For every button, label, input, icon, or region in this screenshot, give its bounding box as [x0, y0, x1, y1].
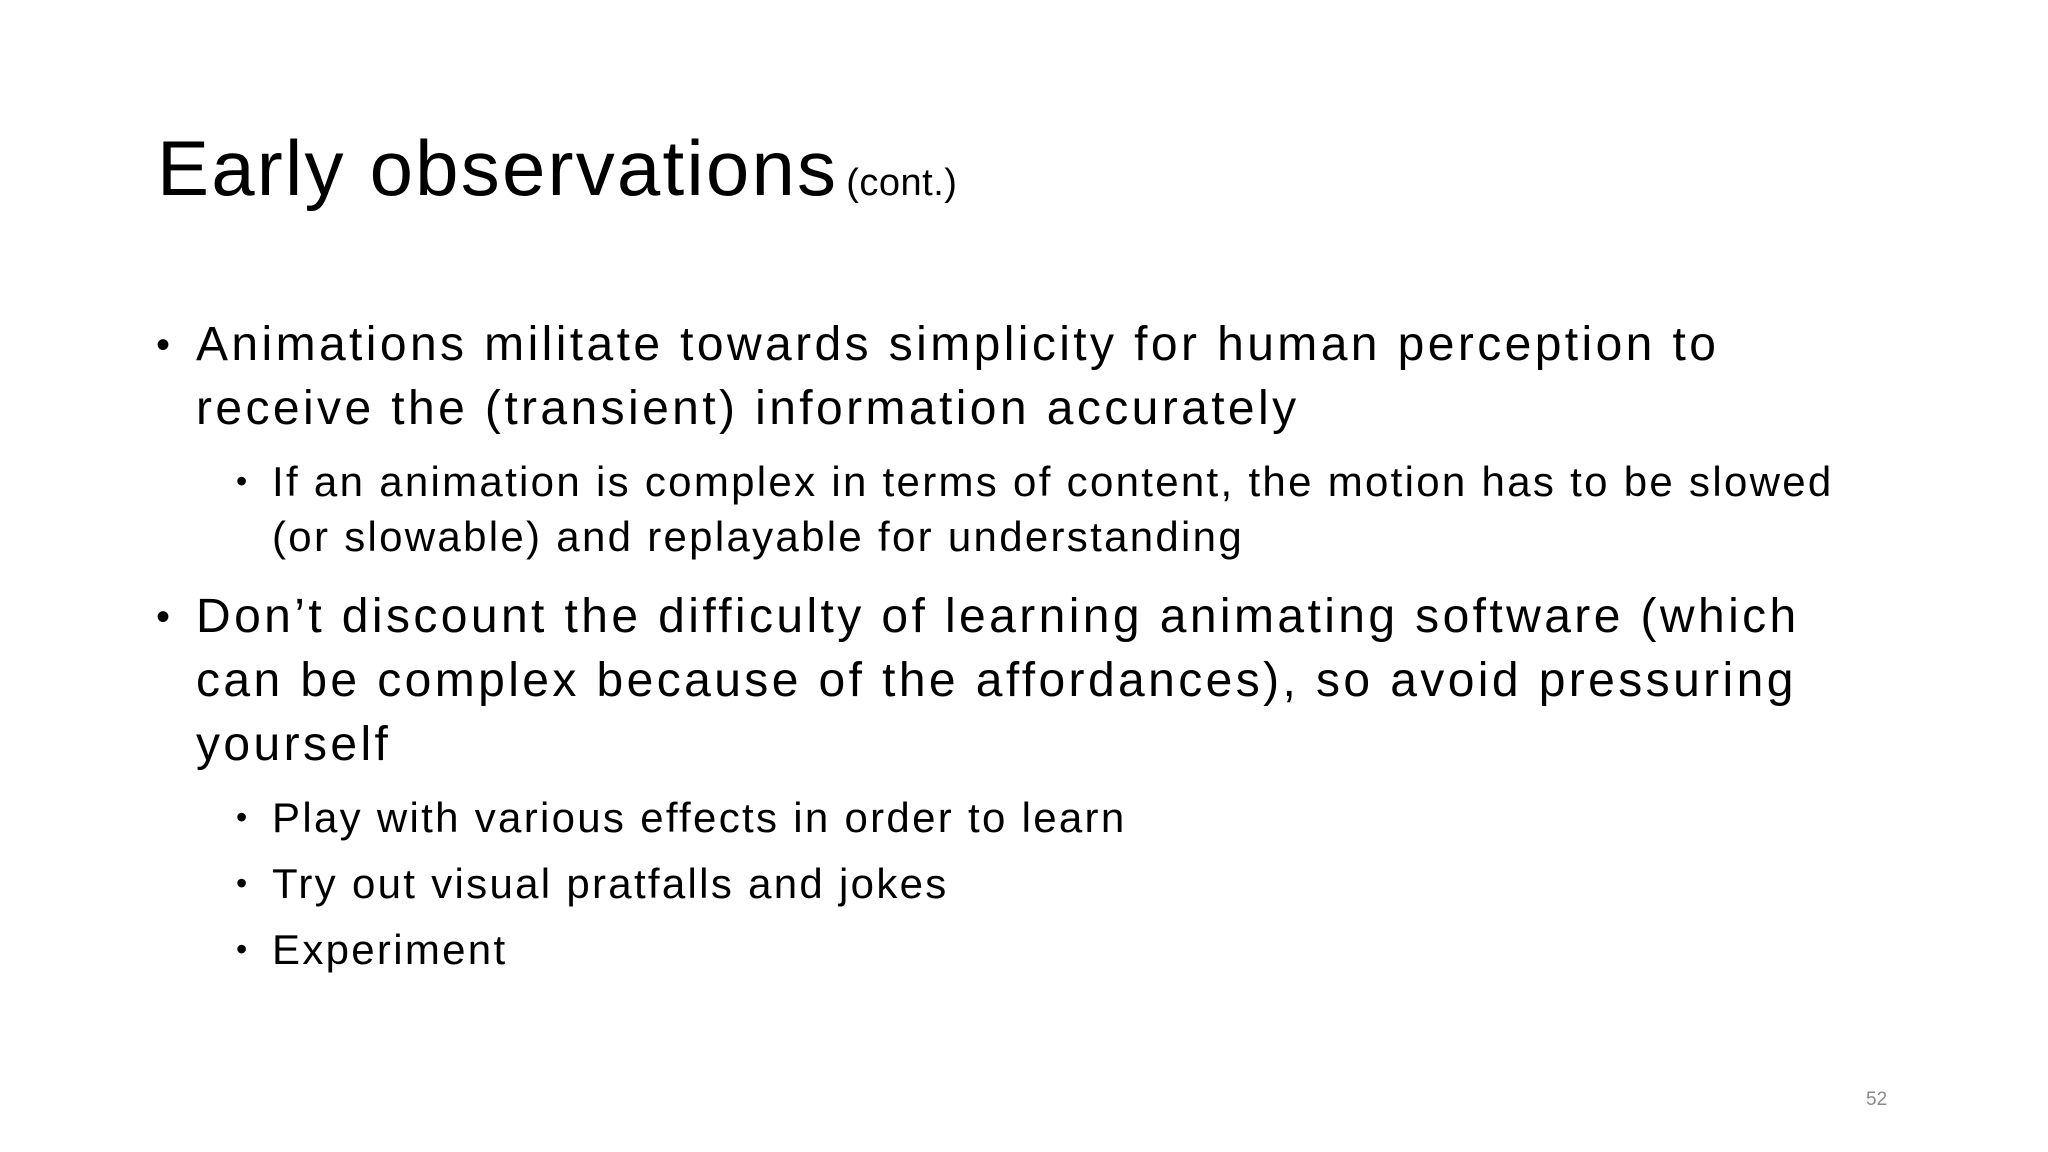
text: • [156, 595, 173, 639]
sub-bullet: visual pratfalls: Try out visual pratfalls and jokes [272, 860, 949, 907]
text: • [236, 799, 250, 835]
text: • [236, 463, 250, 499]
bullet: difficulty of learning software: can be complex because of the affordances), so avoid pressuring [196, 654, 1797, 707]
sub-bullet: complex animation: (or slowable) and replayable for understanding [272, 513, 1244, 560]
page number: 52 [1866, 1089, 1887, 1110]
title: Early observations(cont.) [157, 124, 957, 212]
text: • [236, 931, 250, 967]
bullet: difficulty of learning software: yourself [196, 718, 391, 771]
bullet: difficulty of learning software: Don’t discount the difficulty of learning animating software (which [196, 590, 1800, 643]
sub-bullet: experiment: Experiment [272, 926, 507, 973]
bullet: animations simplicity [156, 318, 1719, 435]
text: • [156, 323, 173, 367]
sub-bullet: complex animation [236, 458, 1834, 560]
sub-bullet: play with effects: Play with various effects in order to learn [272, 794, 1126, 841]
bullet: difficulty of learning software [156, 590, 1800, 771]
bullet: animations simplicity: Animations militate towards simplicity for human perception to [196, 318, 1719, 371]
bullet: animations simplicity: receive the (transient) information accurately [196, 382, 1300, 435]
text: • [236, 865, 250, 901]
sub-bullet: complex animation: If an animation is complex in terms of content, the motion has to be slowed [272, 458, 1834, 505]
